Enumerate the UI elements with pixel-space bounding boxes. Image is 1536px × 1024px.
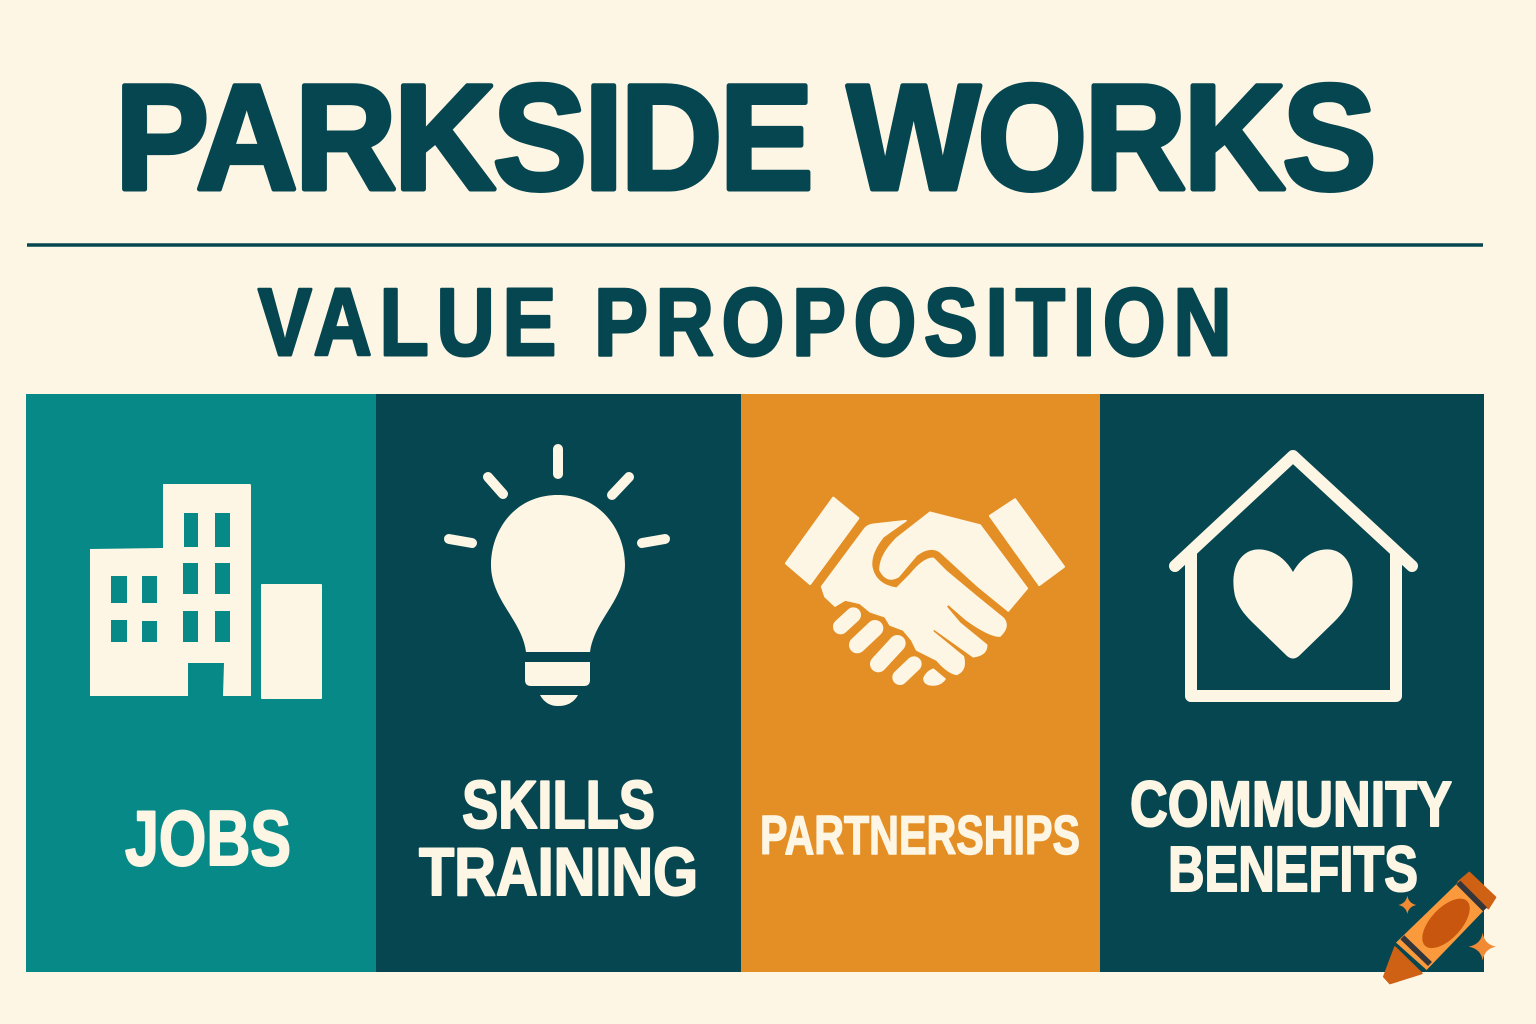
icon: house with heart: [1175, 456, 1412, 696]
title: PARKSIDE WORKS: [115, 53, 1376, 221]
label: community benefits: [1130, 768, 1452, 905]
icon: crayon with sparkles: [1384, 873, 1496, 983]
icon: light bulb: [449, 449, 665, 706]
label: partnerships: PARTNERSHIPS: [760, 804, 1080, 866]
panel: partnerships: [741, 394, 1100, 972]
panel: skills training: [376, 394, 741, 972]
panel: community benefits: [1100, 394, 1484, 972]
icon: handshake: [786, 498, 1064, 685]
label: skills training: TRAINING: [419, 834, 698, 910]
subtitle: VALUE PROPOSITION: [258, 268, 1232, 376]
label: skills training: [419, 767, 698, 910]
label: skills training: SKILLS: [462, 767, 655, 843]
label: community benefits: BENEFITS: [1168, 833, 1418, 905]
panel: jobs: [26, 394, 376, 972]
icon: office buildings: [90, 484, 322, 699]
label: community benefits: COMMUNITY: [1130, 768, 1452, 840]
label: jobs: JOBS: [125, 794, 291, 882]
